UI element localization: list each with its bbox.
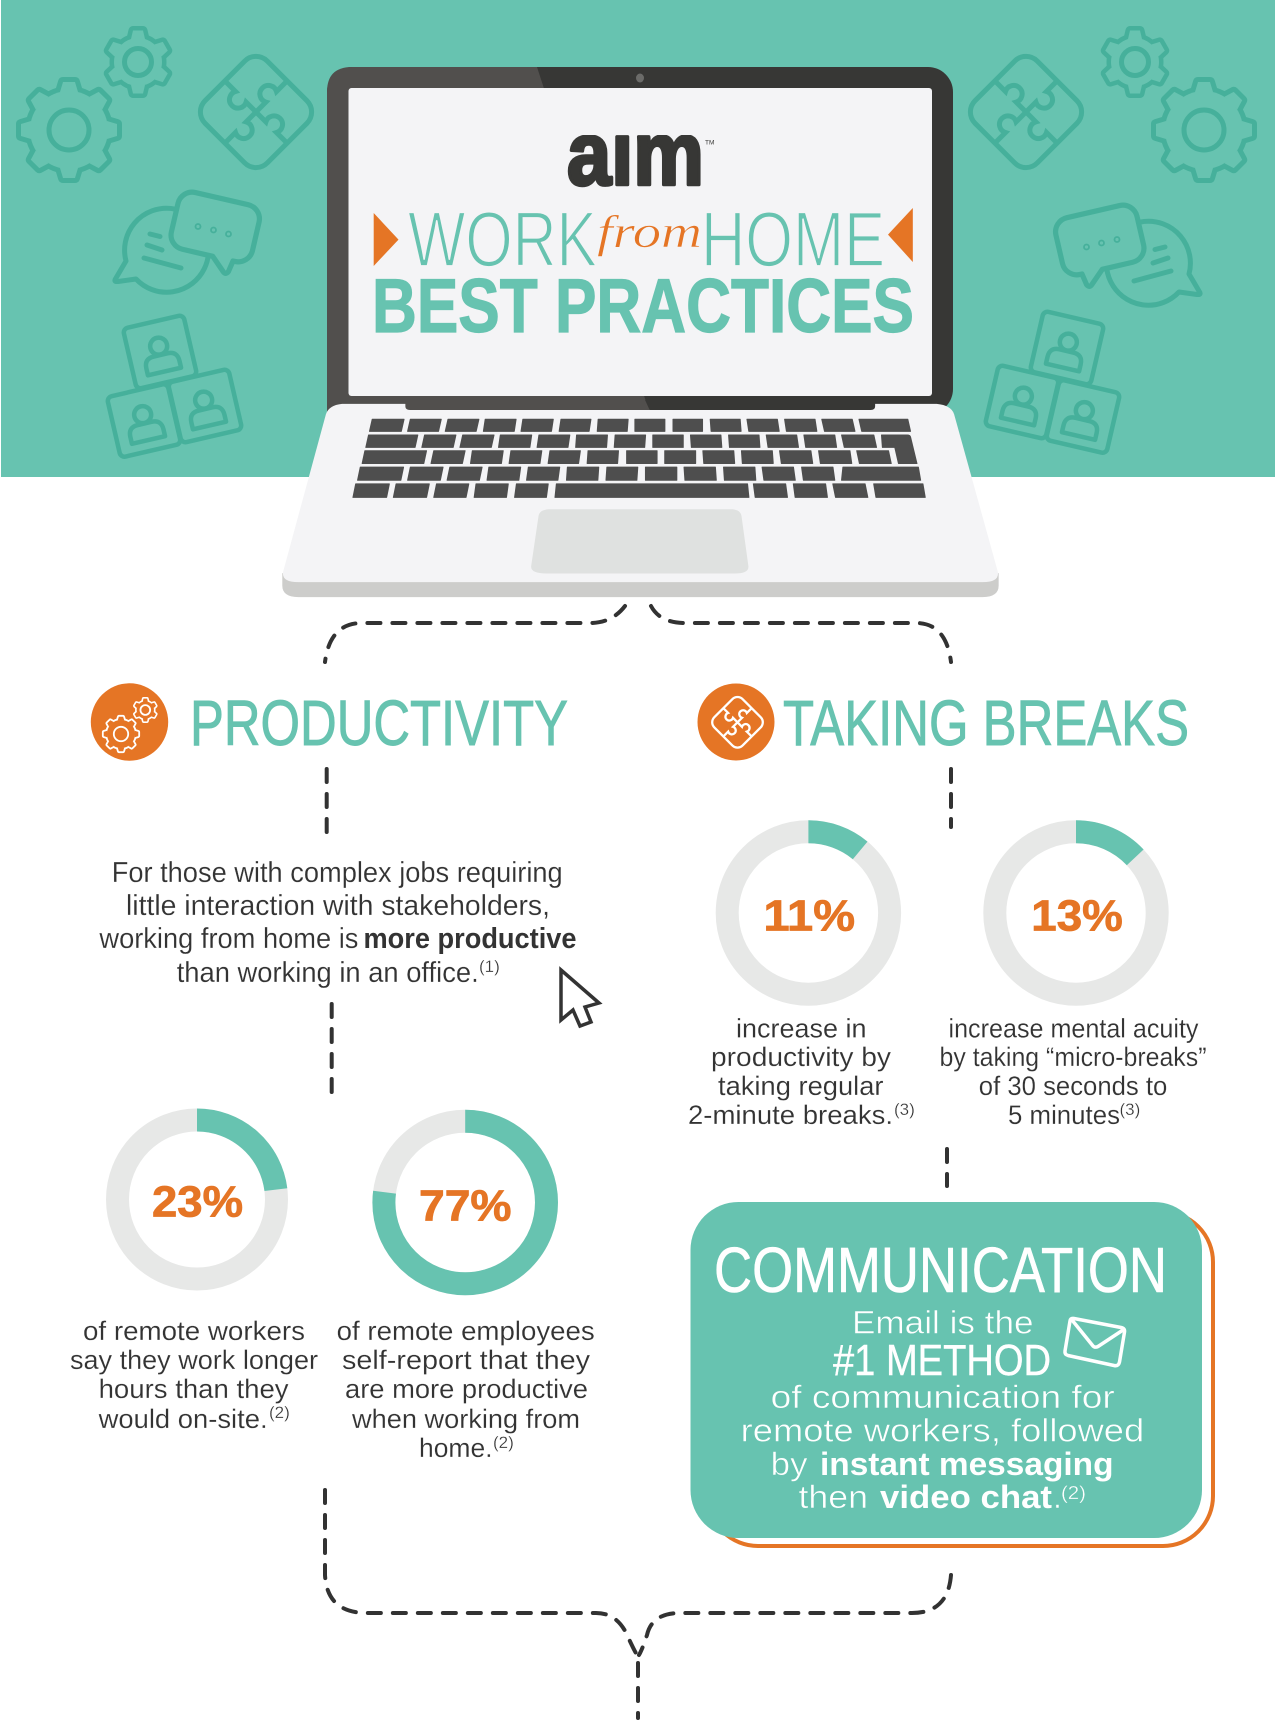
caption 11%: productivity by	[711, 1042, 892, 1072]
laptop base	[282, 400, 999, 597]
productivity statement: than working in an office.	[177, 957, 479, 989]
donut chart 77%: 77%	[419, 1182, 512, 1230]
icon: chat bubbles right	[1053, 202, 1200, 305]
communication text: by	[771, 1446, 808, 1482]
dashed connector	[330, 1004, 334, 1092]
communication text	[741, 1304, 1144, 1515]
icon: people blocks right	[985, 311, 1120, 454]
donut chart 13%: 13%	[1031, 892, 1123, 941]
icon: large gear left	[21, 82, 117, 178]
title: best practices: BEST PRACTICES	[372, 264, 914, 349]
communication text: of communication for	[771, 1379, 1115, 1415]
logo: aim: aim	[567, 104, 704, 204]
icon: chat bubbles left	[115, 189, 262, 292]
communication text: Email is the	[852, 1304, 1034, 1340]
dashed connector	[949, 769, 953, 827]
title: work from home: WORK	[408, 195, 597, 283]
caption 11%: 2-minute breaks.	[688, 1100, 893, 1130]
communication text: remote workers, followed	[741, 1413, 1144, 1449]
caption 23%: (2)	[269, 1403, 290, 1422]
heading: communication: COMMUNICATION	[714, 1234, 1167, 1306]
communication text: (2)	[1061, 1483, 1086, 1503]
header icons, right	[964, 30, 1252, 454]
title: work from home: from	[597, 206, 702, 257]
keyboard	[353, 419, 925, 497]
caption 23%: hours than they	[99, 1374, 289, 1404]
bottom connector	[325, 1490, 951, 1718]
laptop screen	[348, 88, 932, 396]
laptop	[282, 67, 999, 597]
logo: aim: TM	[705, 140, 714, 146]
caption 13%: by taking “micro-breaks”	[940, 1042, 1206, 1072]
caption 77%	[337, 1316, 595, 1463]
communication text: #1 METHOD	[833, 1336, 1051, 1385]
icon: orange puzzle badge	[698, 684, 774, 760]
caption 23%	[70, 1316, 318, 1434]
caption 77%: (2)	[493, 1433, 514, 1452]
panel: taking breaks	[688, 684, 1206, 1186]
teal card	[690, 1202, 1202, 1538]
productivity statement: working from home is	[98, 923, 358, 955]
productivity statement: (1)	[479, 957, 500, 976]
donut chart 77%	[384, 1121, 546, 1284]
productivity statement: For those with complex jobs requiring	[112, 857, 563, 889]
caption 13%	[940, 1013, 1206, 1130]
caption 77%: when working from	[351, 1404, 580, 1434]
left orange arrow	[374, 213, 398, 266]
panel: communication callout	[690, 1202, 1213, 1546]
icon: cursor arrow	[561, 970, 599, 1026]
icon: orange gears badge	[91, 683, 168, 761]
right orange arrow	[888, 208, 913, 262]
donut chart 13%	[995, 832, 1157, 994]
caption 13%: increase mental acuity	[948, 1013, 1199, 1043]
caption 13%: (3)	[1120, 1100, 1140, 1119]
title: work from home: HOME	[701, 195, 885, 283]
orange offset outline	[708, 1212, 1213, 1546]
caption 77%: home.	[419, 1433, 492, 1463]
caption 11%: taking regular	[718, 1071, 884, 1101]
caption 77%: are more productive	[345, 1374, 588, 1404]
icon: small gear right	[1104, 30, 1166, 94]
caption 13%: of 30 seconds to	[979, 1071, 1167, 1101]
caption 11%	[688, 1013, 915, 1130]
icon: people blocks left	[107, 315, 242, 458]
teal header band	[1, 0, 1275, 477]
donut chart 11%	[727, 832, 890, 994]
caption 13%: 5 minutes	[1008, 1100, 1120, 1130]
caption 23%: of remote workers	[83, 1316, 305, 1346]
icon: puzzle left	[194, 50, 318, 174]
caption 77%: self-report that they	[342, 1345, 591, 1375]
dashed connector	[325, 769, 329, 833]
caption 23%: would on-site.	[98, 1404, 268, 1434]
caption 77%: of remote employees	[337, 1316, 595, 1346]
productivity statement: more productive	[364, 923, 576, 955]
donut chart 23%	[118, 1120, 276, 1279]
donut chart 11%: 11%	[764, 892, 855, 941]
caption 23%: say they work longer	[70, 1345, 318, 1375]
icon: envelope	[1065, 1318, 1125, 1366]
communication text: instant messaging	[820, 1446, 1114, 1482]
icon: large gear right	[1156, 82, 1252, 178]
dashed connector	[945, 1149, 949, 1186]
caption 11%: (3)	[894, 1100, 915, 1119]
communication text: video chat	[880, 1479, 1052, 1515]
heading: productivity: PRODUCTIVITY	[190, 687, 568, 759]
icon: small gear left	[107, 30, 169, 94]
communication text: .	[1053, 1479, 1062, 1515]
header icons, left	[21, 30, 318, 458]
icon: puzzle right	[964, 50, 1088, 174]
laptop lid	[327, 67, 953, 414]
communication text: then	[798, 1479, 868, 1515]
donut chart 23%: 23%	[152, 1178, 243, 1226]
trackpad	[531, 509, 748, 574]
connector from laptop	[325, 606, 951, 662]
title: work from home	[374, 195, 913, 283]
productivity statement: little interaction with stakeholders,	[126, 890, 550, 922]
panel: productivity	[70, 683, 599, 1463]
caption 11%: increase in	[736, 1013, 866, 1043]
productivity statement	[98, 857, 577, 989]
